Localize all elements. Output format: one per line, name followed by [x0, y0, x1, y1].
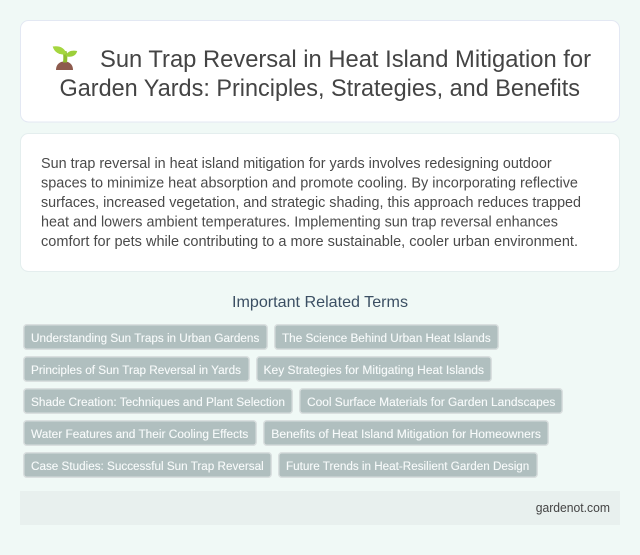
chip: science behind heat islands [275, 325, 498, 349]
chip: future trends: Future Trends in Heat-Resilient Garden Design [286, 459, 529, 473]
description text: spaces to minimize heat absorption and promote cooling. By incorporating reflective [41, 176, 578, 192]
chip: science behind heat islands: The Science Behind Urban Heat Islands [282, 331, 491, 345]
chip: future trends [279, 453, 537, 477]
title line 1: Sun Trap Reversal in Heat Island Mitigation for [100, 46, 591, 73]
chip: key strategies: Key Strategies for Mitigating Heat Islands [264, 363, 484, 377]
chip: benefits: Benefits of Heat Island Mitigation for Homeowners [271, 427, 541, 441]
panel: title card [20, 20, 620, 122]
chip: shade creation [24, 389, 292, 413]
description text: comfort for pets while contributing to a more sustainable, cooler urban environment. [41, 234, 578, 250]
chip: cool surface materials: Cool Surface Materials for Garden Landscapes [307, 395, 555, 409]
footer source text: gardenot.com [536, 500, 610, 515]
chip: key strategies [257, 357, 491, 381]
heading: important related terms: Important Related Terms [232, 294, 408, 311]
description text [41, 156, 581, 250]
panel: description [20, 134, 620, 272]
description text: Sun trap reversal in heat island mitigation for yards involves redesigning outdoor [41, 156, 552, 172]
description text: heat and lowers ambient temperatures. Implementing sun trap reversal enhances [41, 214, 558, 230]
chip: case studies: Case Studies: Successful Sun Trap Reversal [31, 459, 264, 473]
chip: understanding sun traps [24, 325, 267, 349]
description text: surfaces, increased vegetation, and strategic shading, this approach reduces trapped [41, 195, 581, 211]
footer bar [20, 491, 620, 525]
chip: case studies [24, 453, 271, 477]
chip: cool surface materials [300, 389, 562, 413]
chip: water features [24, 421, 256, 445]
chip: water features: Water Features and Their Cooling Effects [31, 427, 248, 441]
panel: related term chips [24, 325, 562, 477]
chip: understanding sun traps: Understanding Sun Traps in Urban Gardens [31, 331, 259, 345]
chip: principles [24, 357, 249, 381]
chip: benefits [264, 421, 548, 445]
icon: seedling [53, 46, 77, 70]
chip: shade creation: Shade Creation: Techniques and Plant Selection [31, 395, 285, 409]
title line 2: Garden Yards: Principles, Strategies, and Benefits [60, 75, 580, 102]
chip: principles: Principles of Sun Trap Reversal in Yards [31, 363, 241, 377]
